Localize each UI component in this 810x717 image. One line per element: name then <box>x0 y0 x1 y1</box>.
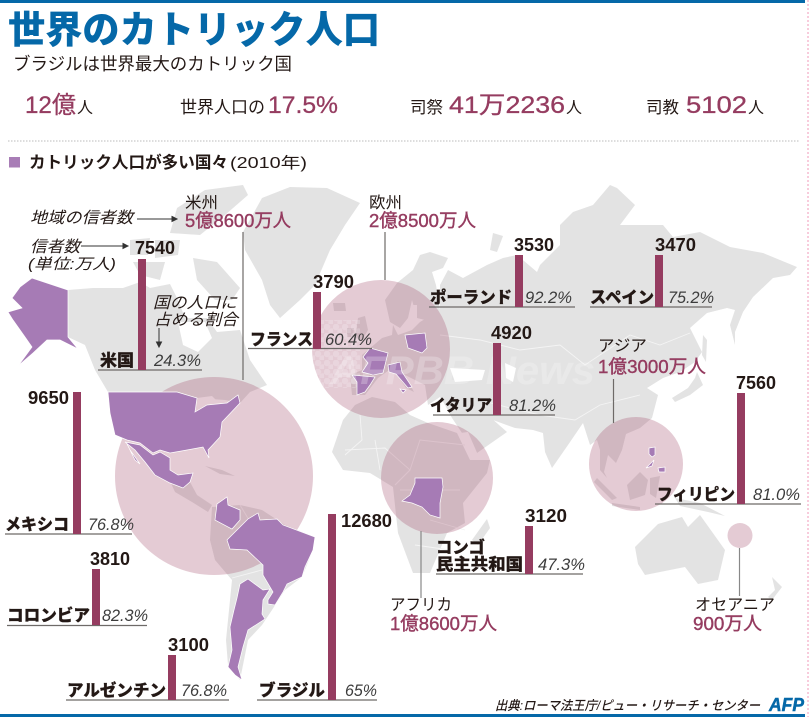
figure: bishops: 5102 <box>686 92 747 119</box>
highlighted country: Italy <box>388 362 412 393</box>
world map <box>8 185 797 680</box>
region label: Africa: 1億8600万人 <box>390 613 497 634</box>
region circle: Asia <box>589 417 683 511</box>
country bar: DR Congo: コンゴ <box>436 537 485 557</box>
region circle: Americas <box>115 377 313 575</box>
country bar: Brazil <box>257 511 392 700</box>
bottom blue band <box>0 714 805 717</box>
highlighted country: Argentina <box>228 579 270 680</box>
key figures row <box>25 92 764 119</box>
arrow <box>81 244 128 248</box>
country bar: Mexico: メキシコ <box>5 516 69 534</box>
map: white seas and borders <box>178 305 516 458</box>
arrow <box>156 328 162 347</box>
leader line: Africa <box>420 531 422 598</box>
country bar: Brazil: ブラジル <box>259 680 326 700</box>
region label: Americas: 5億8600万人 <box>185 210 291 231</box>
region label: Africa: アフリカ <box>390 597 452 614</box>
map: faint country borders <box>232 333 690 610</box>
country bar: Spain: 3470 <box>655 235 696 255</box>
leader line: Asia <box>612 379 614 423</box>
region circle: Oceania <box>728 523 752 548</box>
country bar: USA: 7540 <box>135 238 175 258</box>
figure: bishops <box>646 92 764 119</box>
key: regional believers <box>30 209 177 227</box>
country bar: Italy <box>430 323 556 415</box>
country bar: USA: 24.3% <box>153 352 201 370</box>
region label: Asia: 1億3000万人 <box>598 356 706 377</box>
highlighted country: Brazil <box>227 513 315 605</box>
highlighted country: DR Congo <box>402 478 443 518</box>
country bar: Philippines: 81.0% <box>753 486 800 504</box>
country bar: DR Congo: 民主共和国 <box>436 554 523 574</box>
legend heading <box>9 152 307 172</box>
region label: Americas <box>185 194 291 231</box>
AFP logo: AFP <box>768 695 805 715</box>
country bar: Italy: イタリア <box>430 396 492 415</box>
region label: Asia <box>598 338 706 377</box>
country bar: Poland: ポーランド <box>430 287 512 307</box>
leader line: Europe <box>384 232 386 280</box>
country bar: Italy: 81.2% <box>509 397 556 415</box>
figure: share of world population <box>180 92 338 119</box>
subtitle: ブラジルは世界最大のカトリック国 <box>13 54 292 74</box>
country bar: DR Congo <box>436 506 585 574</box>
country bar: Argentina: 76.8% <box>181 682 227 700</box>
region circle: Europe <box>312 280 450 418</box>
country bar: Philippines: フィリピン <box>657 485 735 504</box>
country bar: Brazil: 65% <box>345 682 377 700</box>
region label: Asia: アジア <box>598 338 647 355</box>
legend text: カトリック人口が多い国々 <box>29 152 228 172</box>
country bar: Colombia: 82.3% <box>102 607 148 625</box>
key: share of national population: 占める割合 <box>154 311 240 329</box>
key: believers unit: (単位:万人) <box>28 256 116 273</box>
figure: Catholics worldwide: 人 <box>77 100 93 117</box>
highlighted country: Spain <box>352 375 375 395</box>
leader line: Americas <box>242 232 244 380</box>
country bar: DR Congo: 3120 <box>525 506 567 526</box>
country bar: Philippines <box>655 373 801 504</box>
country bar: Spain: 75.2% <box>668 289 714 307</box>
country bar: Poland: 3530 <box>514 235 554 255</box>
figure: priests: 司祭 <box>410 98 444 117</box>
map: Atlantic dot texture in Europe circle <box>312 320 360 388</box>
region label: Oceania <box>693 597 775 634</box>
figure: Catholics worldwide: 12億 <box>25 92 76 119</box>
key: believers unit <box>28 238 128 273</box>
country bar: Argentina: アルゼンチン <box>67 680 166 700</box>
country bar: Spain: スペイン <box>590 289 654 307</box>
country bar: Poland: 92.2% <box>525 289 572 307</box>
region label: Oceania: 900万人 <box>693 613 762 634</box>
key: believers unit: 信者数 <box>30 238 82 256</box>
country bar: Italy: 4920 <box>491 323 532 343</box>
figure: bishops: 人 <box>748 100 764 117</box>
figure: priests: 41万2236 <box>449 92 565 119</box>
figure: bishops: 司教 <box>646 98 679 117</box>
country bar: Colombia: コロンビア <box>7 605 90 625</box>
country bar: USA: 米国 <box>100 350 134 370</box>
country bar: Poland <box>429 235 575 307</box>
country bar: USA <box>98 238 202 370</box>
region circle: Africa <box>381 422 493 534</box>
figure: priests <box>410 92 582 119</box>
highlighted country: United States <box>108 392 240 458</box>
country bar: Colombia <box>7 549 148 626</box>
legend swatch <box>9 157 20 168</box>
key: share of national population <box>153 295 240 347</box>
key: regional believers: 地域の信者数 <box>30 209 135 227</box>
country bar: Mexico: 9650 <box>28 388 69 408</box>
country bar: Colombia: 3810 <box>90 549 130 569</box>
country bar: Spain <box>590 235 714 307</box>
figure: share of world population: 17.5% <box>268 92 338 119</box>
region label: Oceania: オセアニア <box>695 597 775 614</box>
highlighted country: Colombia <box>215 497 240 529</box>
country bar: France: 3790 <box>313 272 354 292</box>
country bar: DR Congo: 47.3% <box>538 556 585 574</box>
country bar: Argentina <box>66 635 229 700</box>
figure: priests: 人 <box>566 100 582 117</box>
top blue band <box>0 0 805 3</box>
highlighted country: Poland <box>405 333 427 353</box>
source credit: 出典:ローマ法王庁/ピュー・リサーチ・センター <box>495 698 761 713</box>
highlighted country: France <box>362 348 388 375</box>
key: share of national population: 国の人口に <box>153 295 238 312</box>
watermark: AFPBB News <box>329 349 595 393</box>
region label: Europe: 欧州 <box>369 194 402 212</box>
country bar: Argentina: 3100 <box>168 635 209 655</box>
country bar: France: 60.4% <box>325 331 372 349</box>
map: land masses <box>68 185 797 680</box>
title: 世界のカトリック人口 <box>8 10 380 52</box>
region label: Africa <box>390 597 497 634</box>
region label: Europe: 2億8500万人 <box>369 210 476 231</box>
country bar: Mexico: 76.8% <box>88 516 134 534</box>
legend year: (2010年) <box>230 154 307 172</box>
figure: share of world population: 世界人口の <box>180 98 265 117</box>
highlighted country: Philippines <box>646 447 665 472</box>
right pink dotted edge <box>807 0 809 717</box>
country bar: Mexico <box>5 388 134 534</box>
country bar: Brazil: 12680 <box>341 511 392 531</box>
arrow <box>137 216 177 222</box>
region label: Europe <box>369 194 476 231</box>
highlighted country: Mexico <box>125 442 193 488</box>
leader line: Oceania <box>738 548 740 596</box>
country bar: Philippines: 7560 <box>736 373 776 393</box>
country bar: France <box>248 272 372 349</box>
country bar: France: フランス <box>250 331 313 349</box>
highlighted country: Alaska <box>8 278 78 366</box>
region label: Americas: 米州 <box>185 194 218 212</box>
